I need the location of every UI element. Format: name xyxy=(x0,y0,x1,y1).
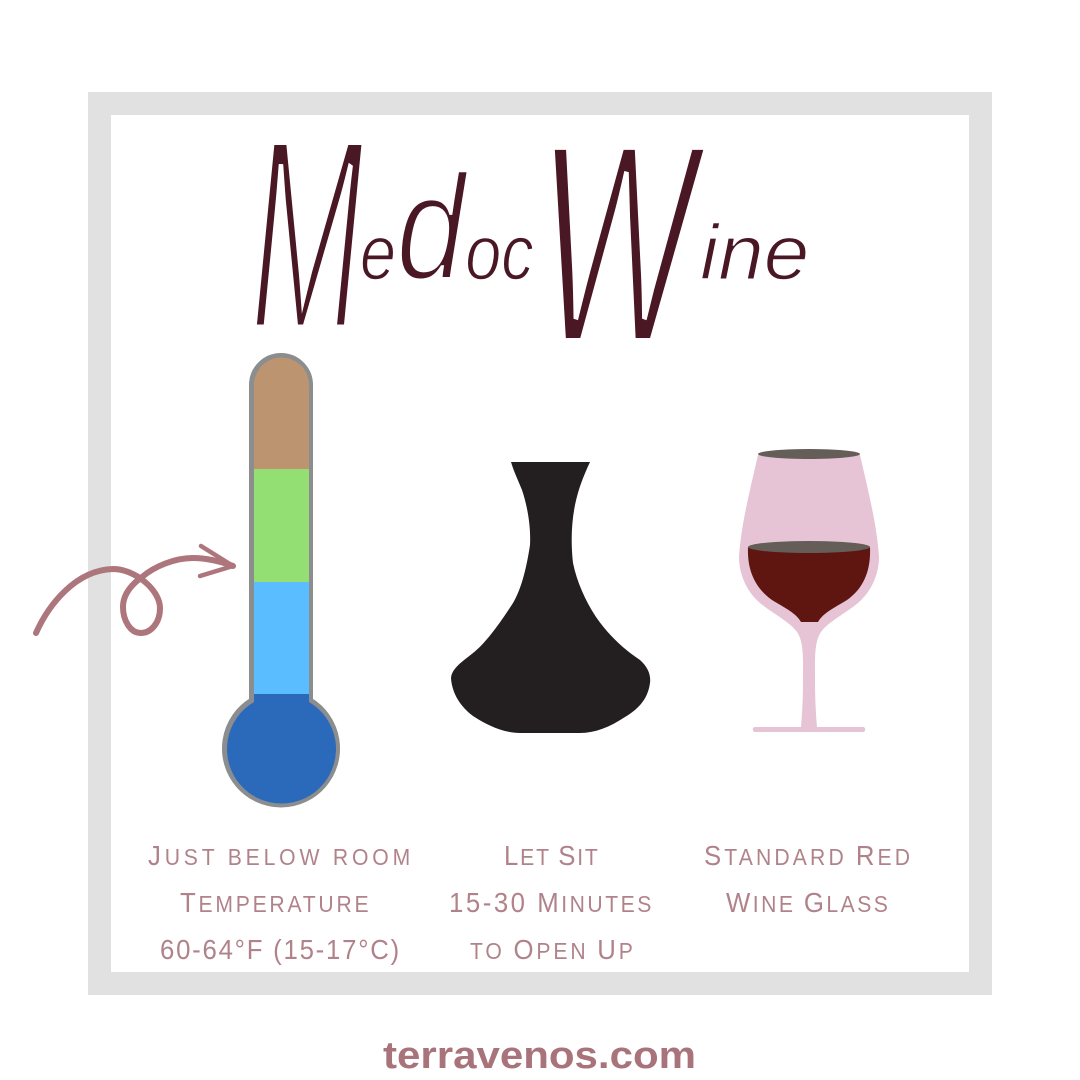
caption: temperature: 60-64°F (15-17°C) xyxy=(160,934,399,965)
panel: grey frame xyxy=(100,104,980,984)
caption: decanting time: LET SIT xyxy=(504,840,598,871)
caption: glass type xyxy=(704,840,910,918)
caption: decanting time: 15-30 MINUTES xyxy=(449,887,651,918)
icon: wine glass xyxy=(739,449,879,732)
footer: website: terravenos.com xyxy=(383,1035,696,1077)
title: W xyxy=(538,85,708,403)
title: M xyxy=(250,81,364,387)
caption: temperature xyxy=(148,840,410,965)
caption: temperature: JUST BELOW ROOM xyxy=(148,840,410,871)
icon: decanter xyxy=(451,462,650,733)
caption: glass type: STANDARD RED xyxy=(704,840,910,871)
arrow xyxy=(36,546,233,633)
caption: decanting time xyxy=(449,840,651,965)
caption: temperature: TEMPERATURE xyxy=(180,887,369,918)
caption: glass type: WINE GLASS xyxy=(726,887,888,918)
icon: thermometer xyxy=(224,355,338,805)
title: edoc xyxy=(360,144,534,312)
title xyxy=(250,81,809,403)
caption: decanting time: TO OPEN UP xyxy=(470,934,633,965)
title: ine xyxy=(700,209,809,296)
